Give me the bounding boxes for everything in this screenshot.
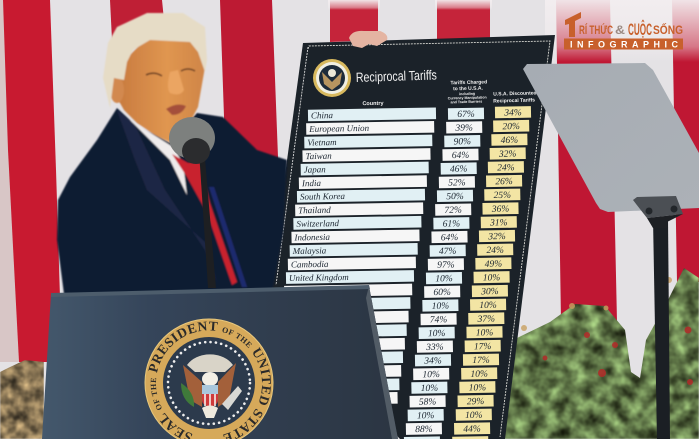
inner coat stripe: [209, 187, 247, 287]
column: discounted tariffs values: 37%: [477, 315, 495, 325]
column: discounted tariffs values: 10%: [479, 301, 497, 311]
presidential seal: [144, 318, 274, 439]
column: countries: Taiwan: [305, 151, 332, 161]
shirt collar: [130, 120, 187, 195]
column: countries: Japan: [304, 164, 326, 175]
column: tariffs charged values: 90%: [454, 137, 471, 147]
speaker: [57, 13, 287, 294]
logo infographic text: INFOGRAPHIC: [570, 40, 678, 50]
column: tariffs charged values: 47%: [439, 247, 457, 257]
column: countries: Vietnam: [307, 137, 337, 148]
column: countries: Cambodia: [291, 259, 329, 270]
column: tariffs charged values: 33%: [425, 343, 444, 353]
prompter mount: [633, 196, 683, 228]
logo: Tri Thuc & Cuoc Song Infographic: [564, 12, 683, 50]
column heading: discounted tariffs: U.S.A. Discounted: [493, 90, 537, 98]
podium top lip: [51, 285, 370, 297]
column heading: discounted tariffs: Reciprocal Tariffs: [493, 97, 535, 105]
mic head: [169, 117, 215, 159]
column: countries: Thailand: [298, 205, 331, 215]
logo wordmark: &: [615, 23, 625, 37]
column: discounted tariffs values: [452, 106, 531, 439]
eyes: [146, 69, 195, 76]
column: discounted tariffs values: 24%: [497, 163, 515, 174]
tariff board: [268, 35, 555, 439]
column: discounted tariffs values: 25%: [494, 191, 511, 201]
column heading: tariffs charged: [447, 79, 488, 104]
coat: [57, 108, 287, 294]
column: discounted tariffs values: 17%: [474, 342, 492, 352]
tie: [172, 154, 237, 285]
column: tariffs charged values: 10%: [422, 370, 440, 380]
logo wordmark: [579, 20, 683, 39]
column: countries: United Kingdom: [289, 272, 349, 283]
hand holding board: [349, 31, 387, 48]
column: tariffs charged values: 10%: [435, 274, 453, 284]
column: tariffs charged values: 10%: [432, 302, 449, 312]
prompter pole: [653, 218, 670, 439]
coat lapel: [117, 110, 218, 285]
logo letter T: [565, 12, 581, 37]
column: countries: Malaysia: [292, 245, 327, 256]
board title: Reciprocal Tariffs: [356, 67, 437, 85]
column: discounted tariffs values: 26%: [495, 177, 513, 187]
column: tariffs charged values: [404, 108, 484, 439]
column: tariffs charged values: 67%: [457, 110, 475, 120]
column: countries: China: [311, 110, 334, 120]
mouth: [166, 105, 186, 115]
column: discounted tariffs values: 10%: [476, 328, 493, 339]
column: tariffs charged values: 88%: [415, 425, 433, 435]
column heading: country: Country: [362, 101, 385, 107]
column: countries: Switzerland: [296, 218, 339, 229]
column heading: tariffs charged: Tariffs Charged: [450, 79, 487, 86]
column: discounted tariffs values: 10%: [469, 383, 486, 394]
logo wordmark: SỐNG: [653, 22, 683, 37]
column: tariffs charged values: 58%: [419, 397, 436, 408]
column: tariffs charged values: 64%: [441, 233, 458, 243]
logo wordmark: CUỘC: [628, 20, 652, 39]
column: discounted tariffs values: 31%: [489, 218, 508, 229]
hair: [103, 13, 207, 108]
teleprompter: [523, 63, 699, 439]
logo infographic band: [564, 38, 683, 50]
podium: [42, 285, 398, 439]
column: tariffs charged values: 61%: [443, 219, 460, 230]
bushes: right: [504, 268, 699, 439]
column heading: discounted tariffs: [493, 90, 537, 105]
mic cup: [182, 138, 210, 164]
column: tariffs charged values: 39%: [454, 123, 473, 134]
nose: [168, 70, 184, 94]
column: tariffs charged values: 97%: [437, 260, 455, 271]
column: countries: [269, 107, 436, 406]
column: tariffs charged values: 72%: [444, 206, 462, 216]
prompter glass: [523, 63, 699, 212]
column: tariffs charged values: 60%: [433, 288, 451, 298]
column: discounted tariffs values: 32%: [487, 232, 506, 242]
column heading: tariffs charged: including: [459, 92, 475, 96]
column: discounted tariffs values: 30%: [480, 287, 499, 297]
bushes: left: [0, 360, 44, 439]
column: discounted tariffs values: 32%: [498, 150, 517, 160]
seal eagle: [181, 354, 242, 418]
column: tariffs charged values: 10%: [421, 384, 438, 394]
logo wordmark: RÍ THỨC: [579, 22, 613, 37]
column: countries: Indonesia: [293, 232, 331, 242]
column: discounted tariffs values: 36%: [491, 205, 509, 215]
column: tariffs charged values: 52%: [448, 178, 466, 189]
column: tariffs charged values: 10%: [417, 411, 435, 421]
column: discounted tariffs values: 24%: [486, 246, 504, 256]
microphone: [169, 117, 216, 288]
ear: [110, 77, 124, 103]
column: tariffs charged values: 10%: [428, 329, 446, 339]
column: discounted tariffs values: 10%: [483, 273, 500, 284]
column: discounted tariffs values: 17%: [472, 356, 490, 366]
column: tariffs charged values: 74%: [430, 315, 447, 326]
column heading: tariffs charged: and Trade Barriers: [450, 100, 482, 104]
column: discounted tariffs values: 44%: [463, 425, 481, 435]
column: tariffs charged values: 64%: [452, 151, 469, 161]
column: discounted tariffs values: 49%: [485, 260, 502, 270]
column heading: tariffs charged: Currency Manipulation: [448, 95, 487, 100]
column heading: tariffs charged: to the U.S.A.: [453, 86, 484, 92]
column: countries: European Union: [308, 123, 370, 134]
podium side panel: [366, 286, 398, 439]
column: discounted tariffs values: 10%: [470, 370, 488, 380]
column: discounted tariffs values: 46%: [501, 136, 518, 146]
neck and face: [110, 38, 205, 143]
mic stand: [198, 135, 216, 288]
column: discounted tariffs values: 29%: [467, 397, 484, 407]
column: tariffs charged values: 46%: [450, 165, 468, 175]
column: discounted tariffs values: 10%: [465, 411, 483, 421]
column: discounted tariffs values: 34%: [503, 108, 522, 119]
column: tariffs charged values: 34%: [423, 356, 442, 367]
board seal: [313, 59, 351, 97]
column: discounted tariffs values: 20%: [502, 122, 520, 132]
column: countries: India: [301, 178, 321, 188]
column: tariffs charged values: 50%: [446, 192, 464, 202]
column: countries: South Korea: [300, 191, 345, 202]
